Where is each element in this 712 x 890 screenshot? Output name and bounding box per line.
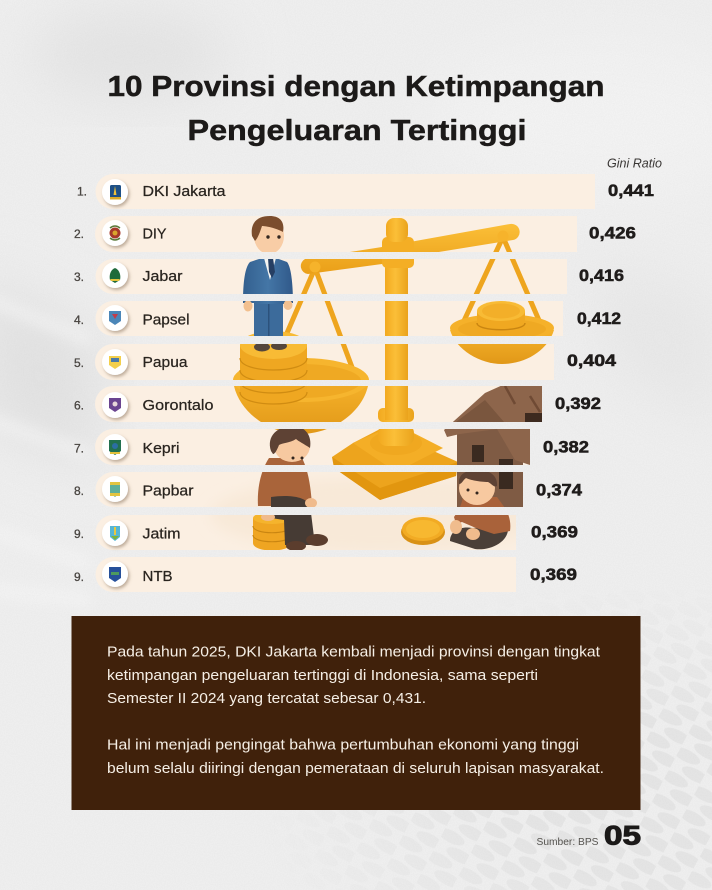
sad boy sitting on floor bbox=[450, 470, 510, 549]
scale column bbox=[385, 268, 408, 420]
rank numbers: 9. bbox=[74, 527, 84, 541]
icon: Papua emblem bbox=[102, 349, 128, 375]
Gini ratio values: 0,426 bbox=[589, 224, 636, 242]
province names: Jatim bbox=[142, 526, 180, 542]
icon: Kepri emblem bbox=[102, 434, 128, 460]
rank numbers: 8. bbox=[74, 484, 84, 498]
sad boy sitting on coins bbox=[253, 426, 328, 551]
Gini ratio values: 0,404 bbox=[567, 351, 617, 370]
province names: DIY bbox=[142, 226, 166, 242]
right hanger bbox=[462, 237, 541, 325]
source note: Sumber: BPS bbox=[536, 836, 598, 848]
page number: 05 bbox=[604, 820, 641, 850]
right coin stack bbox=[476, 301, 526, 330]
province names: Kepri bbox=[142, 440, 180, 457]
paragraph 1: Semester II 2024 yang tercatat sebesar 0,431. bbox=[107, 691, 426, 707]
icon: Jatim emblem bbox=[102, 520, 128, 546]
paragraph 2: Hal ini menjadi pengingat bahwa pertumbuhan ekonomi yang tinggi bbox=[107, 738, 579, 754]
floor shading bbox=[220, 484, 516, 547]
scale base bbox=[332, 408, 458, 500]
province names bbox=[142, 183, 226, 585]
province names: Papua bbox=[142, 354, 188, 371]
house bbox=[444, 384, 545, 509]
paragraph 1 bbox=[107, 644, 600, 707]
province names: DKI Jakarta bbox=[142, 183, 226, 200]
left pan bbox=[233, 358, 369, 434]
Gini ratio values: 0,441 bbox=[608, 181, 654, 200]
left hanger bbox=[284, 272, 354, 366]
paragraph 2: belum selalu diiringi dengan pemerataan di seluruh lapisan masyarakat. bbox=[107, 761, 604, 777]
icon: Papbar emblem bbox=[102, 476, 128, 502]
paragraph 1: Pada tahun 2025, DKI Jakarta kembali menjadi provinsi dengan tingkat bbox=[107, 644, 600, 660]
gold coin on floor bbox=[401, 517, 445, 545]
province names: Gorontalo bbox=[142, 397, 214, 414]
icon: Gorontalo emblem bbox=[102, 392, 128, 418]
illustration: scale of inequality, visible through the bars bbox=[210, 216, 554, 553]
title: 10 Provinsi dengan Ketimpangan bbox=[108, 71, 604, 103]
rank numbers: 2. bbox=[74, 227, 84, 241]
title bbox=[108, 71, 604, 147]
icon: DKI Jakarta emblem bbox=[102, 179, 128, 205]
province names: NTB bbox=[142, 568, 172, 585]
right pan bbox=[450, 314, 554, 364]
Gini ratio values: 0,392 bbox=[555, 394, 601, 413]
province names: Papsel bbox=[142, 312, 190, 328]
panel: summary text bbox=[72, 616, 640, 810]
icon: Papsel emblem bbox=[102, 305, 128, 331]
rank numbers: 6. bbox=[74, 398, 84, 412]
column label: Gini Ratio: Gini Ratio bbox=[607, 156, 662, 170]
Gini ratio values: 0,374 bbox=[536, 480, 583, 500]
province names: Papbar bbox=[142, 482, 194, 500]
Gini ratio values: 0,412 bbox=[577, 309, 621, 328]
province names: Jabar bbox=[142, 268, 182, 285]
Gini ratio values: 0,416 bbox=[579, 266, 624, 285]
rank numbers bbox=[74, 184, 87, 584]
paragraph 1: ketimpangan pengeluaran tertinggi di Indonesia, sama seperti bbox=[107, 668, 538, 684]
rank numbers: 9. bbox=[74, 570, 84, 584]
rank numbers: 4. bbox=[74, 313, 84, 327]
province emblem icons bbox=[102, 179, 128, 587]
rank numbers: 1. bbox=[77, 184, 87, 198]
Gini ratio values: 0,369 bbox=[531, 522, 578, 542]
horizontal bars bbox=[95, 174, 595, 592]
rank numbers: 5. bbox=[74, 356, 84, 370]
icon: DIY emblem bbox=[102, 220, 128, 246]
title: Pengeluaran Tertinggi bbox=[188, 115, 526, 147]
rank numbers: 3. bbox=[74, 270, 84, 284]
Gini ratio values: 0,382 bbox=[543, 438, 589, 456]
Gini ratio values bbox=[530, 181, 654, 584]
left coin stack bbox=[240, 331, 307, 406]
man in suit bbox=[243, 216, 293, 352]
Gini ratio values: 0,369 bbox=[530, 565, 577, 584]
scale beam bbox=[301, 218, 520, 274]
icon: Jabar emblem bbox=[102, 262, 128, 288]
paragraph 2 bbox=[107, 738, 604, 777]
icon: NTB emblem bbox=[102, 561, 128, 587]
rank numbers: 7. bbox=[74, 442, 84, 456]
